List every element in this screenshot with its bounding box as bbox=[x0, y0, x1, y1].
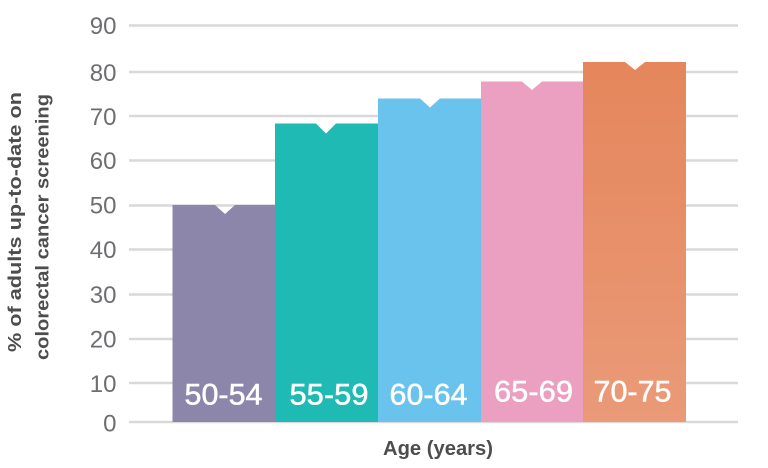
y-axis tick labels: 30 bbox=[90, 282, 116, 309]
y-axis tick labels: 90 bbox=[90, 13, 116, 40]
bar: 60-64 bbox=[378, 98, 481, 422]
y-axis tick labels: 50 bbox=[90, 192, 116, 220]
y-axis tick labels: 20 bbox=[90, 326, 116, 354]
bar: 55-59: 55-59 bbox=[290, 378, 368, 412]
y-axis title second line: colorectal cancer screening bbox=[32, 94, 52, 360]
y-axis tick labels: 60 bbox=[90, 148, 116, 175]
y-axis tick labels: 10 bbox=[90, 371, 116, 398]
bar: 70-75: 70-75 bbox=[594, 376, 672, 408]
y-axis tick labels bbox=[90, 13, 116, 438]
bar: 60-64: 60-64 bbox=[390, 378, 468, 412]
y-axis title: % of adults up-to-date on bbox=[5, 92, 25, 352]
x-axis title: Age (years) bbox=[383, 438, 493, 460]
bar: 55-59 bbox=[275, 124, 378, 422]
bar: 65-69: 65-69 bbox=[494, 376, 573, 408]
bar: 65-69 bbox=[481, 82, 583, 422]
y-axis tick labels: 0 bbox=[103, 410, 116, 438]
y-axis tick labels: 70 bbox=[90, 104, 116, 131]
bar: 70-75 bbox=[583, 62, 686, 422]
bar: 50-54 bbox=[172, 205, 275, 422]
y-axis tick labels: 40 bbox=[90, 237, 116, 264]
y-axis tick labels: 80 bbox=[90, 60, 116, 87]
bar: 50-54: 50-54 bbox=[184, 378, 262, 412]
